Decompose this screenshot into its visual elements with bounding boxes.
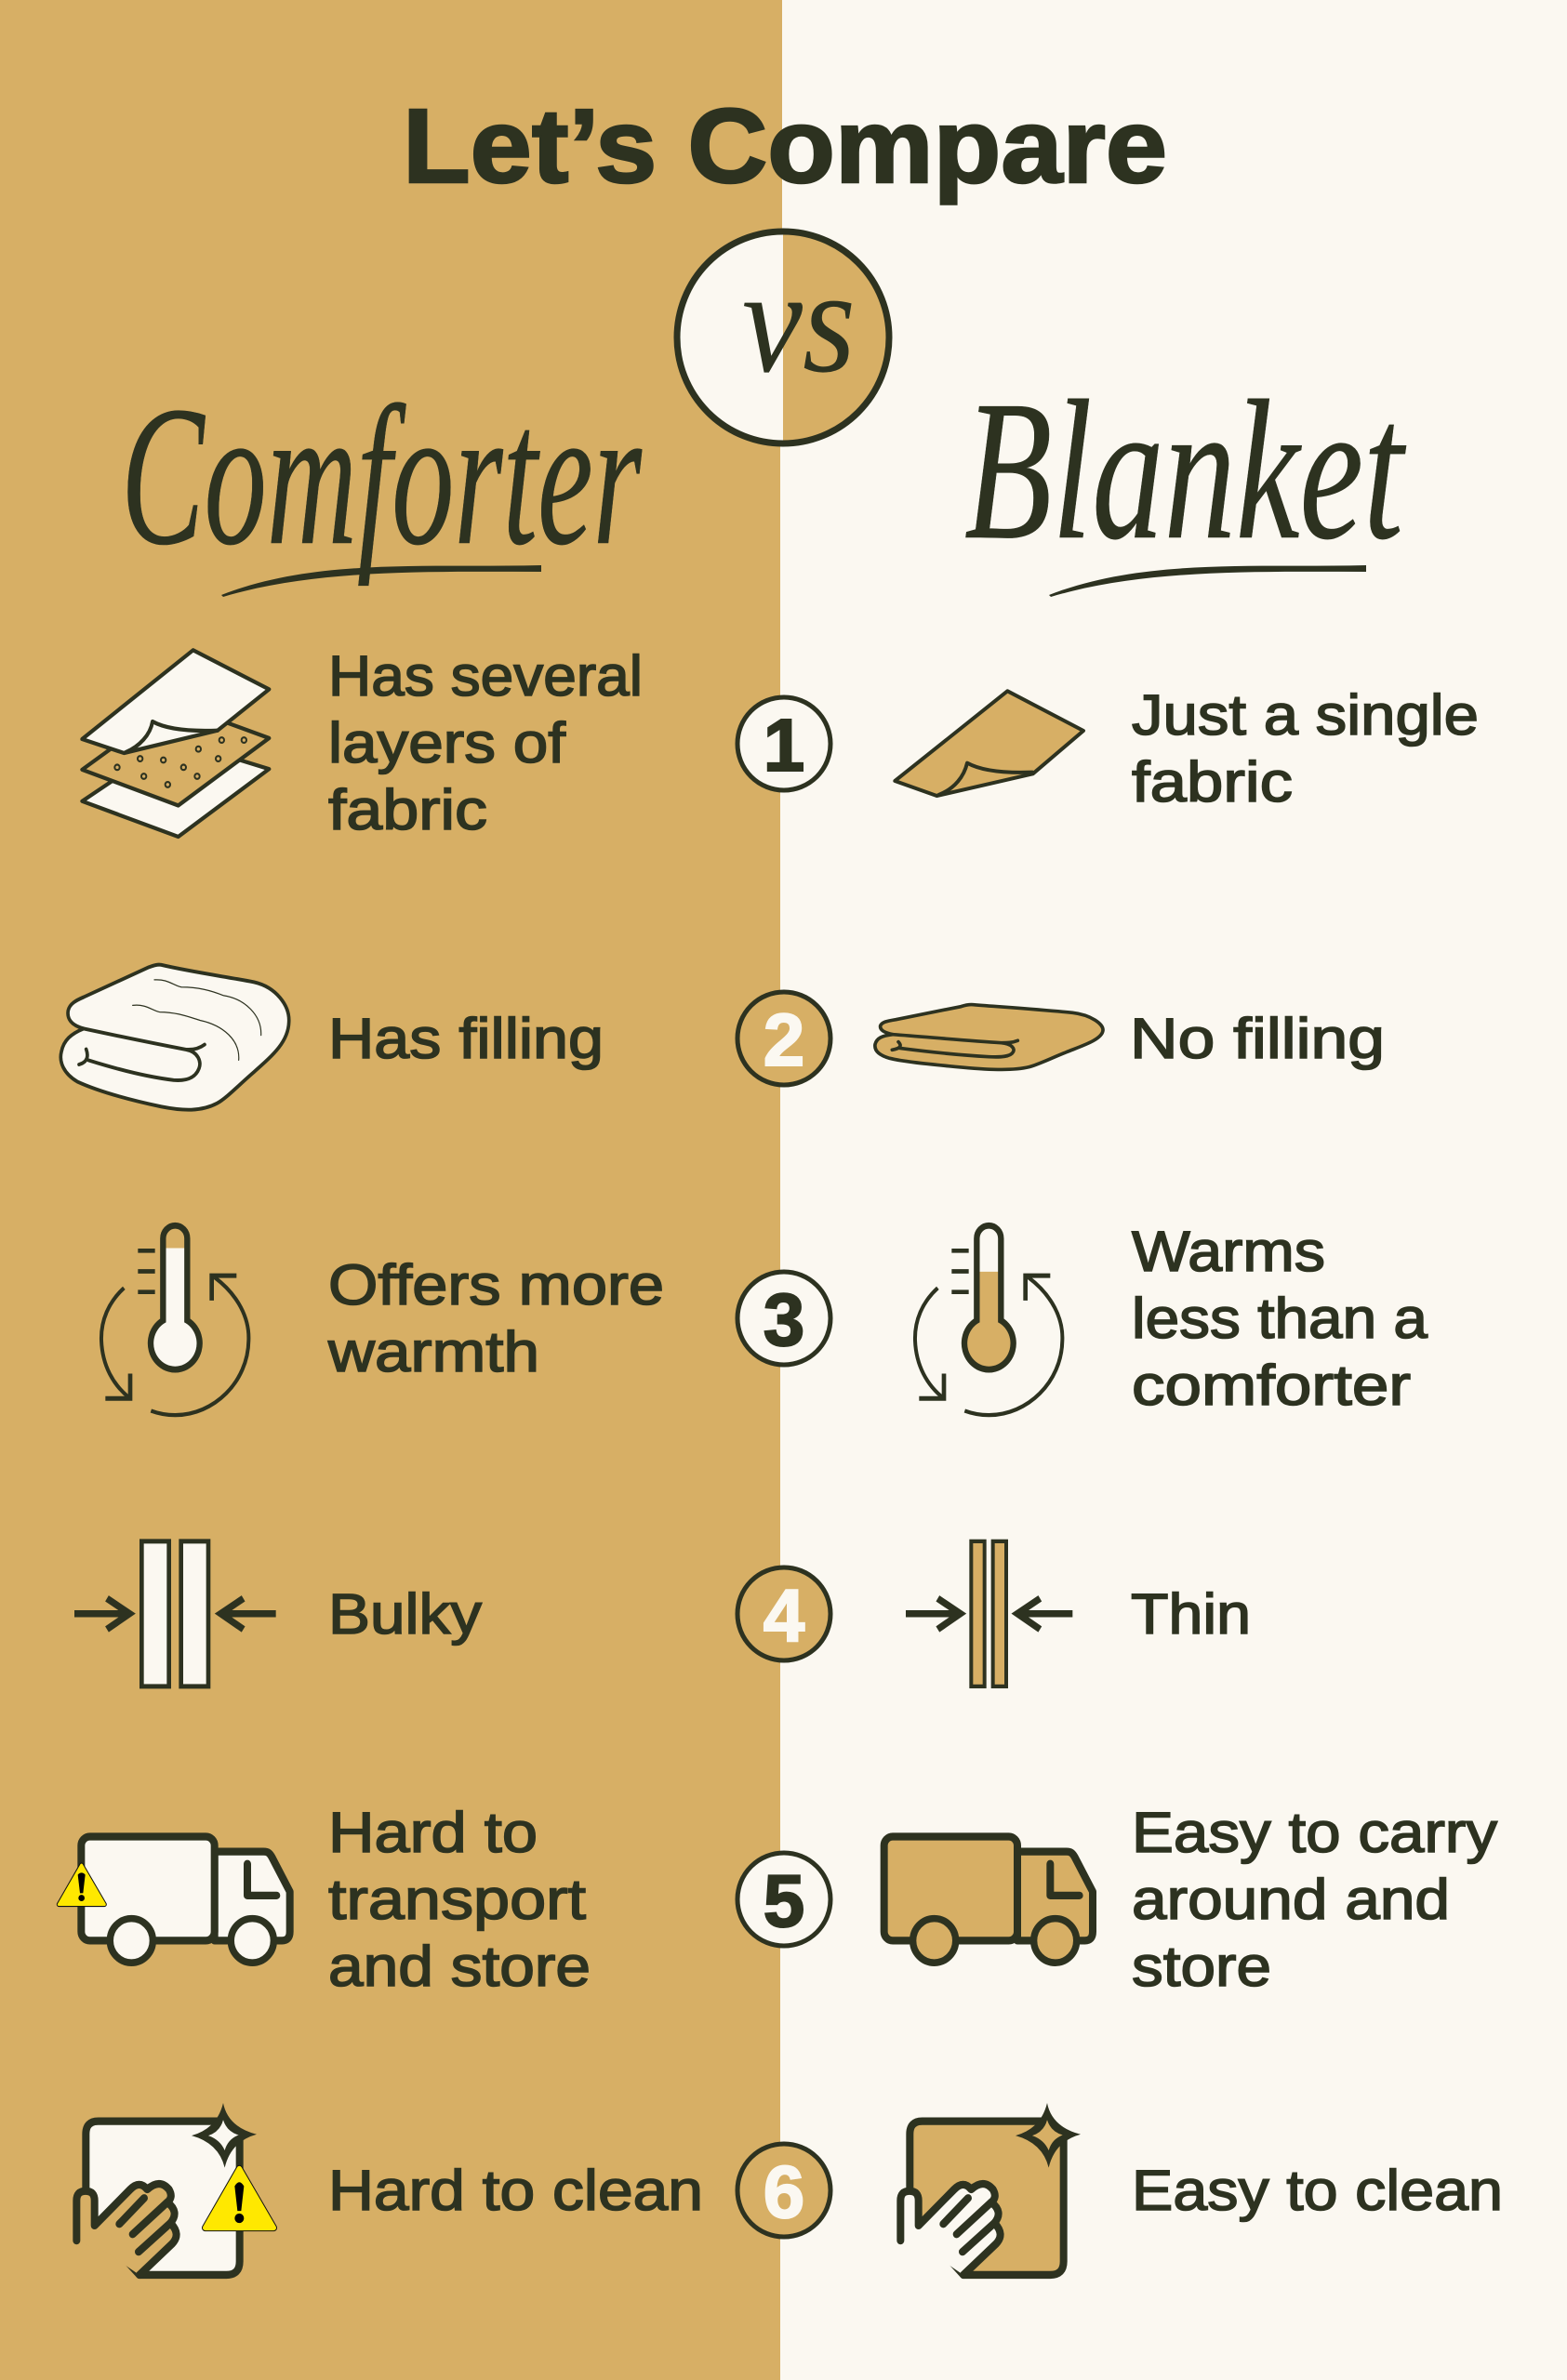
row 3 comforter [101, 1225, 664, 1415]
row 4 blanket [906, 1541, 1251, 1686]
text: has several layers of fabric: layers of [328, 711, 566, 774]
number 4 [737, 1567, 830, 1660]
panel: comforter background [0, 0, 782, 2380]
text: no filling: No filling [1130, 1007, 1385, 1070]
text: just a single fabric [1132, 683, 1479, 813]
text: easy to carry around and store: Easy to carry [1132, 1801, 1498, 1864]
icon: single fabric [895, 691, 1083, 796]
text: warms less than a comforter: Warms [1132, 1220, 1325, 1283]
row 4 comforter [74, 1541, 483, 1686]
text: just a single fabric: Just a single [1132, 683, 1479, 747]
text: warms less than a comforter: comforter [1132, 1354, 1411, 1417]
text: hard to transport and store: transport [328, 1868, 586, 1931]
title: Let’s Compare [403, 87, 1167, 205]
icon: thick folded comforter [60, 965, 289, 1110]
text: easy to carry around and store: store [1132, 1935, 1271, 1998]
text: easy to clean: Easy to clean [1132, 2159, 1503, 2222]
icon: thermometer high [101, 1225, 248, 1415]
text: warms less than a comforter [1132, 1220, 1428, 1417]
text: easy to carry around and store: around and [1132, 1868, 1450, 1931]
text: has several layers of fabric: fabric [328, 778, 487, 841]
icon: thin compress [906, 1541, 1072, 1686]
row 5 blanket [884, 1801, 1498, 1998]
number 2 [737, 992, 830, 1085]
row 6 comforter [76, 2103, 703, 2275]
row 6 blanket [900, 2103, 1503, 2275]
icon: thermometer low [915, 1225, 1062, 1415]
icon: fabric layers [82, 650, 269, 837]
text: warms less than a comforter: less than a [1132, 1287, 1428, 1350]
text: hard to transport and store: and store [328, 1935, 591, 1998]
icon: truck [884, 1836, 1093, 1963]
icon: hand wiping cloth with warning [76, 2103, 273, 2275]
number 4: 4 [764, 1574, 805, 1657]
row 2 comforter [60, 965, 604, 1110]
vs badge [677, 231, 889, 443]
icon: hand wiping cloth [900, 2103, 1081, 2275]
row 1 blanket [895, 683, 1479, 813]
number 5: 5 [764, 1859, 804, 1942]
vs badge: vs [742, 238, 856, 403]
icon: small warning triangle [59, 1865, 104, 1904]
heading: Blanket: Blanket [964, 359, 1407, 581]
text: hard to clean: Hard to clean [328, 2159, 703, 2222]
icon: truck with warning [59, 1836, 290, 1963]
text: hard to transport and store: Hard to [328, 1801, 538, 1864]
number 3 [737, 1272, 830, 1365]
row 2 blanket [875, 1005, 1385, 1070]
row 5 comforter [59, 1801, 591, 1998]
icon: bulky compress [74, 1541, 276, 1686]
row 3 blanket [915, 1220, 1428, 1417]
text: has filling: Has filling [328, 1007, 604, 1070]
number 6: 6 [764, 2150, 804, 2233]
number 3: 3 [764, 1278, 804, 1361]
number 1: 1 [764, 704, 804, 787]
icon: thin folded blanket [875, 1005, 1103, 1069]
heading: Blanket [964, 359, 1407, 597]
row 1 comforter [82, 644, 643, 841]
text: has several layers of fabric [328, 644, 643, 841]
text: offers more warmth: warmth [327, 1320, 539, 1383]
text: offers more warmth: Offers more [328, 1253, 664, 1316]
text: offers more warmth [327, 1253, 664, 1383]
icon: large warning triangle [206, 2169, 273, 2228]
number 1 [737, 697, 830, 790]
text: just a single fabric: fabric [1132, 750, 1293, 813]
number 6 [737, 2144, 830, 2237]
text: hard to transport and store [328, 1801, 591, 1998]
text: thin: Thin [1131, 1582, 1251, 1646]
number 2: 2 [764, 998, 804, 1081]
heading: Comforter: Comforter [121, 364, 643, 587]
heading: Comforter [121, 364, 643, 597]
text: easy to carry around and store [1132, 1801, 1498, 1998]
number 5 [737, 1853, 830, 1946]
text: has several layers of fabric: Has several [328, 644, 643, 707]
text: bulky: Bulky [328, 1582, 483, 1646]
panel: blanket background [780, 0, 1567, 2380]
